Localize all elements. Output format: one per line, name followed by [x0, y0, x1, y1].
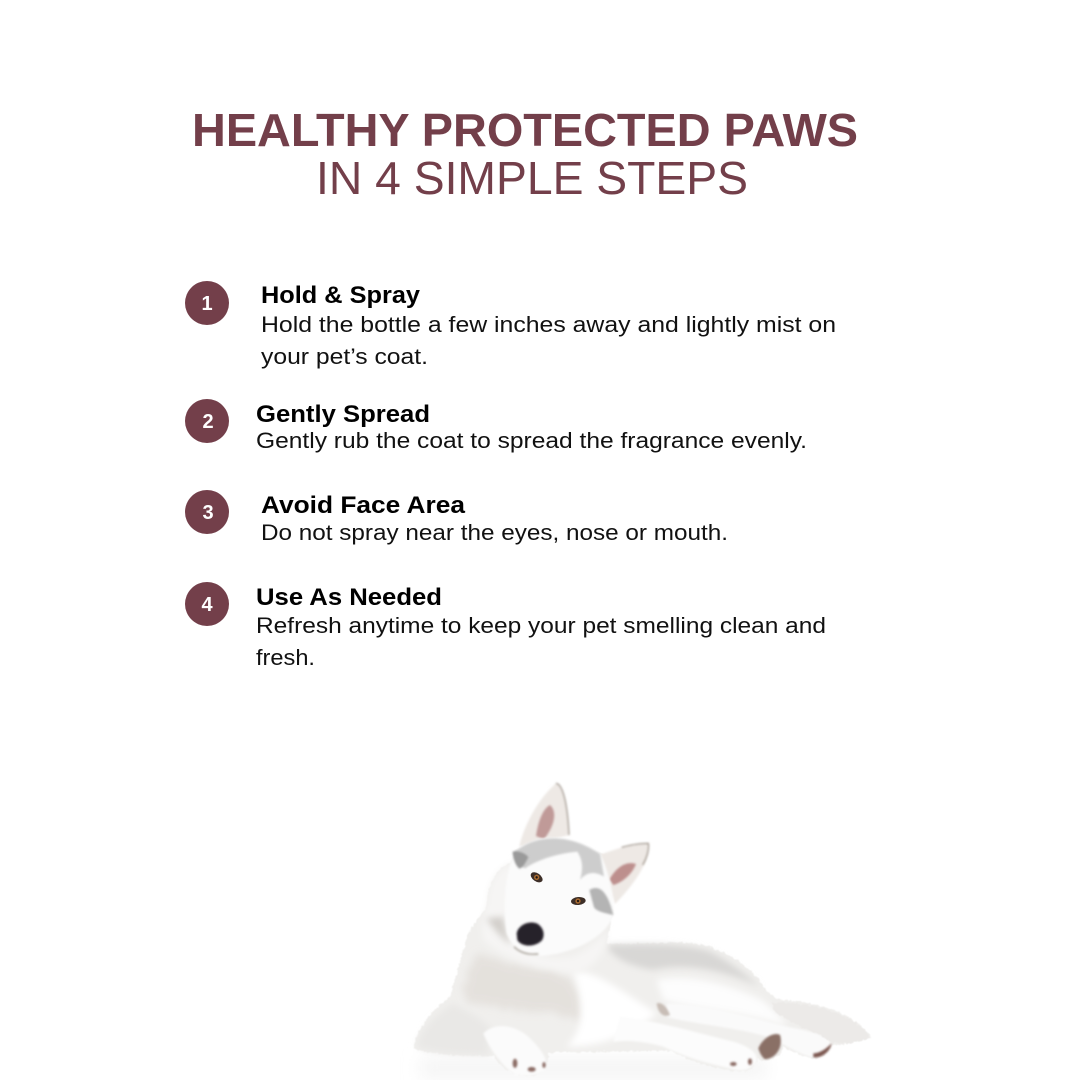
step 3 number badge [185, 490, 229, 534]
rear paw toes [813, 1043, 832, 1057]
husky dog illustration [413, 783, 871, 1080]
ear left [519, 783, 569, 847]
neck ruff [482, 862, 608, 973]
title line 1: HEALTHY PROTECTED PAWS [192, 104, 858, 156]
step 1 number badge: 1 [201, 293, 213, 315]
dog body [413, 848, 871, 1076]
nose [517, 923, 544, 946]
step 1 text: your pet’s coat. [261, 344, 428, 369]
step 3 text: Do not spray near the eyes, nose or mouth. [261, 520, 728, 545]
chest fur [463, 953, 583, 1020]
floor shadow [420, 1057, 767, 1080]
dark brow [513, 851, 528, 869]
back shading [607, 944, 760, 987]
step 3 number badge: 3 [202, 502, 214, 524]
step 4 [185, 582, 826, 670]
grey forehead marking [513, 838, 604, 880]
step 4 number badge: 4 [201, 594, 213, 616]
ear right [600, 843, 649, 904]
tail [772, 1003, 869, 1043]
step 1 text: Hold the bottle a few inches away and lightly mist on [261, 312, 836, 337]
title [192, 104, 858, 204]
front leg [483, 1026, 546, 1076]
head [505, 837, 614, 956]
step 2 number badge: 2 [202, 411, 214, 433]
step 2 [185, 399, 807, 453]
step 2 text: Gently rub the coat to spread the fragrance evenly. [256, 428, 807, 453]
step 1 heading: Hold & Spray [261, 282, 421, 309]
ear right rim [622, 843, 649, 865]
inner ear right [609, 863, 636, 885]
step 1 number badge [185, 281, 229, 325]
front paw claws [513, 1059, 546, 1072]
step 4 text: Refresh anytime to keep your pet smelling clean and [256, 613, 826, 638]
step 4 number badge [185, 582, 229, 626]
left eye [529, 870, 544, 884]
leg crease shadow [657, 1003, 670, 1016]
thigh white [657, 978, 787, 1027]
cheek marking [589, 888, 613, 915]
mouth [514, 947, 538, 954]
right eye [571, 896, 586, 906]
step 1 [185, 281, 836, 369]
ruff shadow [486, 917, 512, 945]
ear left rim [556, 783, 569, 835]
paw pads [758, 1034, 781, 1059]
lower hind leg [613, 1017, 757, 1070]
hind paw toes [730, 1058, 752, 1066]
rear leg upper [667, 1003, 830, 1057]
step 3 heading: Avoid Face Area [261, 492, 466, 519]
inner ear left [536, 805, 554, 839]
step 4 text: fresh. [256, 645, 315, 670]
step 3 [185, 490, 728, 545]
lower left body shade [417, 1003, 493, 1055]
step 4 heading: Use As Needed [256, 584, 442, 611]
title line 2: IN 4 SIMPLE STEPS [316, 152, 748, 204]
shoulder white patch [567, 970, 657, 1047]
step 2 number badge [185, 399, 229, 443]
step 2 heading: Gently Spread [256, 401, 430, 428]
